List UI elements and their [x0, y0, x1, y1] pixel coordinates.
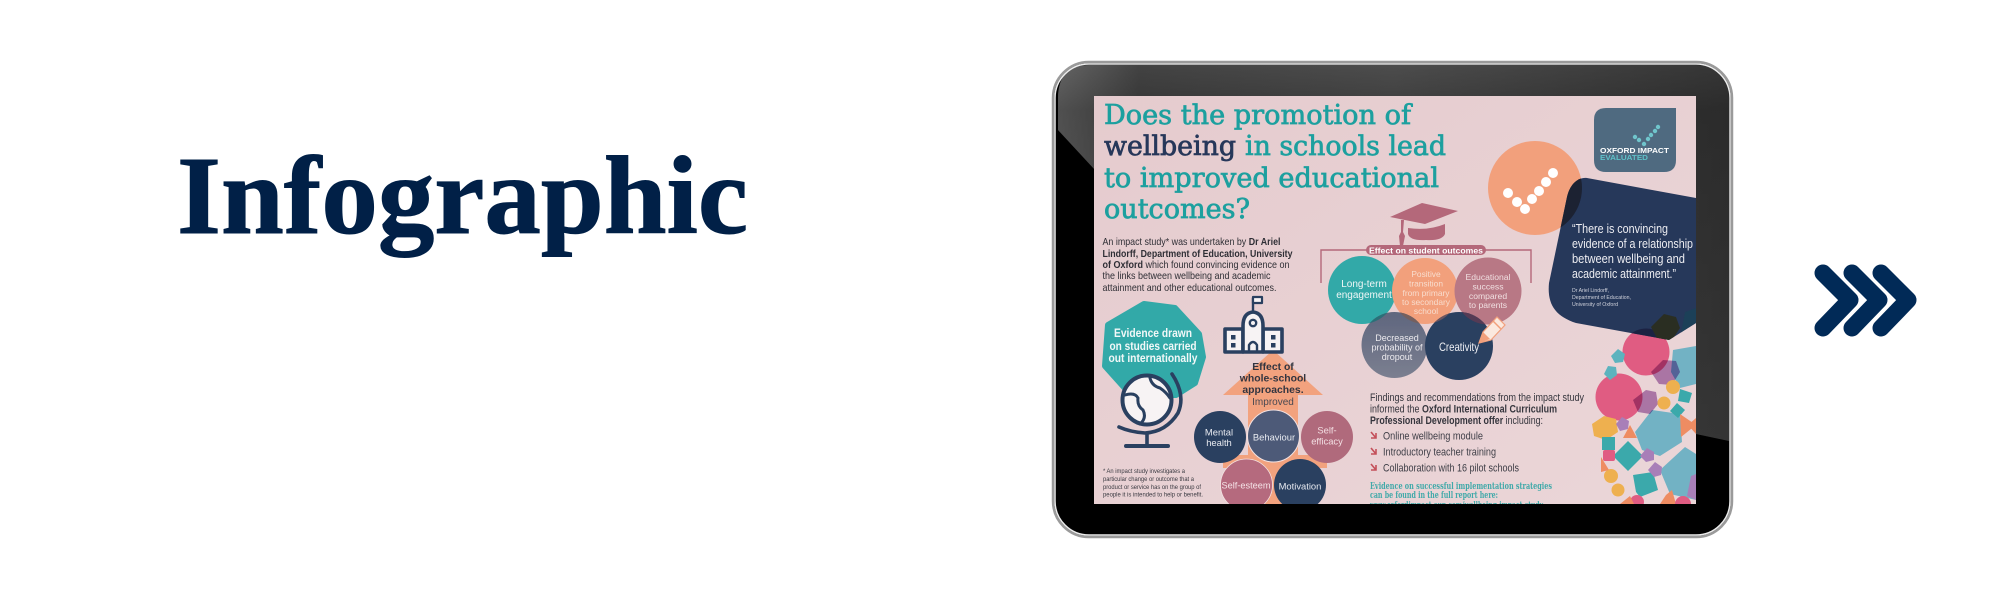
- circle: positive transition: Positive: [1411, 269, 1441, 279]
- creativity overlap tints: [1434, 312, 1486, 324]
- heading: outcomes?: [1104, 194, 1250, 225]
- quote text: [1572, 221, 1693, 281]
- circle: self-efficacy: Self-: [1317, 424, 1337, 436]
- bullet 2: Introductory teacher training: [1383, 446, 1496, 458]
- heading: to improved educational: [1104, 163, 1439, 194]
- evidence blob: out internationally: [1108, 353, 1198, 365]
- footnote: * An impact study investigates a: [1103, 468, 1185, 475]
- quote text: “There is convincing: [1572, 221, 1668, 236]
- quote attribution: University of Oxford: [1572, 302, 1618, 308]
- quote attribution: [1572, 288, 1631, 308]
- heading: in schools lead: [1245, 131, 1446, 162]
- tablet inner rim: [1055, 64, 1730, 535]
- evidence link text: can be found in the full report here:: [1370, 491, 1498, 501]
- effect on student outcomes bracket: [1321, 245, 1531, 283]
- circle: educational success: compared: [1469, 291, 1507, 301]
- findings text: Professional Development offer including:: [1370, 415, 1543, 427]
- intro text: An impact study* was undertaken by Dr Ariel: [1102, 236, 1281, 248]
- circle: motivation: [1274, 459, 1326, 504]
- icon: graduation cap: [1390, 203, 1458, 246]
- circle: positive transition: transition: [1409, 278, 1443, 288]
- circle: educational success: success: [1472, 282, 1504, 292]
- poster background: [1094, 96, 1696, 504]
- intro text: of Oxford which found convincing evidence on: [1102, 259, 1290, 271]
- quote text: academic attainment.”: [1572, 266, 1676, 281]
- icon: globe: [1119, 374, 1181, 446]
- circle: mental health: [1194, 411, 1246, 463]
- bullet 2: [1370, 448, 1496, 458]
- findings text: informed the Oxford International Curriculum: [1370, 404, 1557, 416]
- circle: positive transition: to secondary: [1402, 297, 1451, 307]
- circle: self-efficacy: [1301, 411, 1353, 463]
- tablet gloss reflection: [1058, 65, 1729, 441]
- screen: infographic poster: [1094, 96, 1696, 512]
- findings text: [1370, 392, 1584, 427]
- tablet frame: [1053, 62, 1732, 537]
- whole-school arrow: Improved: [1252, 397, 1294, 408]
- logo: Oxford Impact Evaluated: EVALUATED: [1600, 153, 1649, 162]
- tablet gloss shading: [1058, 65, 1729, 441]
- circle: long-term engagement: Long-term: [1341, 279, 1387, 290]
- circle: motivation: Motivation: [1279, 480, 1321, 492]
- circle: decreased probability of dropout: dropout: [1382, 352, 1413, 362]
- evidence link text: Evidence on successful implementation strategies: [1370, 482, 1552, 492]
- icon: school building: [1225, 297, 1282, 352]
- whole-school arrow: [1223, 350, 1327, 504]
- whole-school arrow: Effect of: [1252, 362, 1294, 373]
- quote attribution: Dr Ariel Lindorff,: [1572, 288, 1609, 294]
- evidence blob: on studies carried: [1110, 341, 1196, 353]
- intro text: Lindorff, Department of Education, University: [1102, 248, 1293, 260]
- circle: creativity: [1425, 312, 1493, 380]
- quote panel overlaps: [1560, 178, 1696, 340]
- circle: self-esteem: [1220, 458, 1273, 504]
- bullet 1: [1370, 432, 1483, 442]
- circle: behaviour: Behaviour: [1253, 432, 1295, 442]
- circle: decreased probability of dropout: probability of: [1371, 342, 1423, 352]
- circle: mental health: Mental: [1205, 426, 1233, 438]
- footnote: product or service has on the group of: [1103, 484, 1201, 491]
- decorative shape cluster: [1592, 328, 1696, 512]
- quote text: evidence of a relationship: [1572, 236, 1693, 251]
- icon: pencil: [1479, 317, 1505, 343]
- circle: long-term engagement: engagement: [1336, 290, 1392, 301]
- circle: educational success: Educational: [1466, 272, 1511, 282]
- circle: positive transition: from primary: [1402, 288, 1450, 298]
- evidence blob: Evidence drawn: [1114, 328, 1192, 340]
- bullet 3: Collaboration with 16 pilot schools: [1383, 462, 1519, 474]
- circle: positive transition: school: [1414, 306, 1438, 316]
- logo: Oxford Impact Evaluated: OXFORD IMPACT: [1600, 146, 1669, 155]
- evidence link text: www.oxfordimpact.oup.com/wellbeing-impact-study: [1369, 501, 1544, 511]
- circle: educational success: to parents: [1469, 300, 1507, 310]
- heading: [1104, 100, 1446, 225]
- tablet device: [1053, 62, 1732, 537]
- evidence link text: [1370, 482, 1552, 504]
- whole-school arrow: whole-school: [1239, 374, 1306, 384]
- quote attribution: Department of Education,: [1572, 295, 1631, 301]
- circle: self-esteem: Self-esteem: [1221, 480, 1271, 490]
- circle: long-term engagement: [1328, 256, 1396, 324]
- logo: Oxford Impact Evaluated: [1594, 108, 1676, 172]
- bullet 3: [1370, 464, 1519, 474]
- bullet 1: Online wellbeing module: [1383, 430, 1483, 442]
- footnote: particular change or outcome that a: [1103, 476, 1194, 483]
- circle: behaviour: [1248, 410, 1300, 462]
- circle: decreased probability of dropout: Decreased: [1375, 333, 1419, 343]
- intro text: attainment and other educational outcomes.: [1102, 282, 1276, 294]
- footnote: people it is intended to help or benefit.: [1103, 492, 1203, 498]
- quote panel: [1548, 178, 1696, 340]
- orange check circle: [1488, 141, 1582, 235]
- findings text: Findings and recommendations from the impact study: [1370, 392, 1584, 404]
- effect on student outcomes bracket: Effect on student outcomes: [1369, 245, 1483, 255]
- evidence blob: [1105, 304, 1203, 395]
- title: Infographic: [177, 135, 748, 258]
- circle: mental health: health: [1206, 437, 1232, 448]
- circle: self-efficacy: efficacy: [1311, 436, 1343, 446]
- circle: decreased probability of dropout: [1362, 312, 1428, 378]
- heading: wellbeing: [1104, 131, 1236, 162]
- whole-school arrow: approaches.: [1242, 385, 1304, 396]
- heading: Does the promotion of: [1104, 100, 1413, 131]
- bullet list: [1371, 430, 1519, 474]
- intro text: the links between wellbeing and academic: [1102, 270, 1270, 282]
- intro text: [1102, 236, 1293, 294]
- circle: creativity: Creativity: [1439, 340, 1479, 354]
- circle: positive transition: [1392, 258, 1458, 324]
- overlap tints: [1370, 312, 1420, 324]
- footnote: [1103, 468, 1203, 498]
- quote text: between wellbeing and: [1572, 251, 1685, 266]
- circle: educational success: [1454, 258, 1522, 324]
- icon: triple chevron arrow: [1823, 273, 1908, 328]
